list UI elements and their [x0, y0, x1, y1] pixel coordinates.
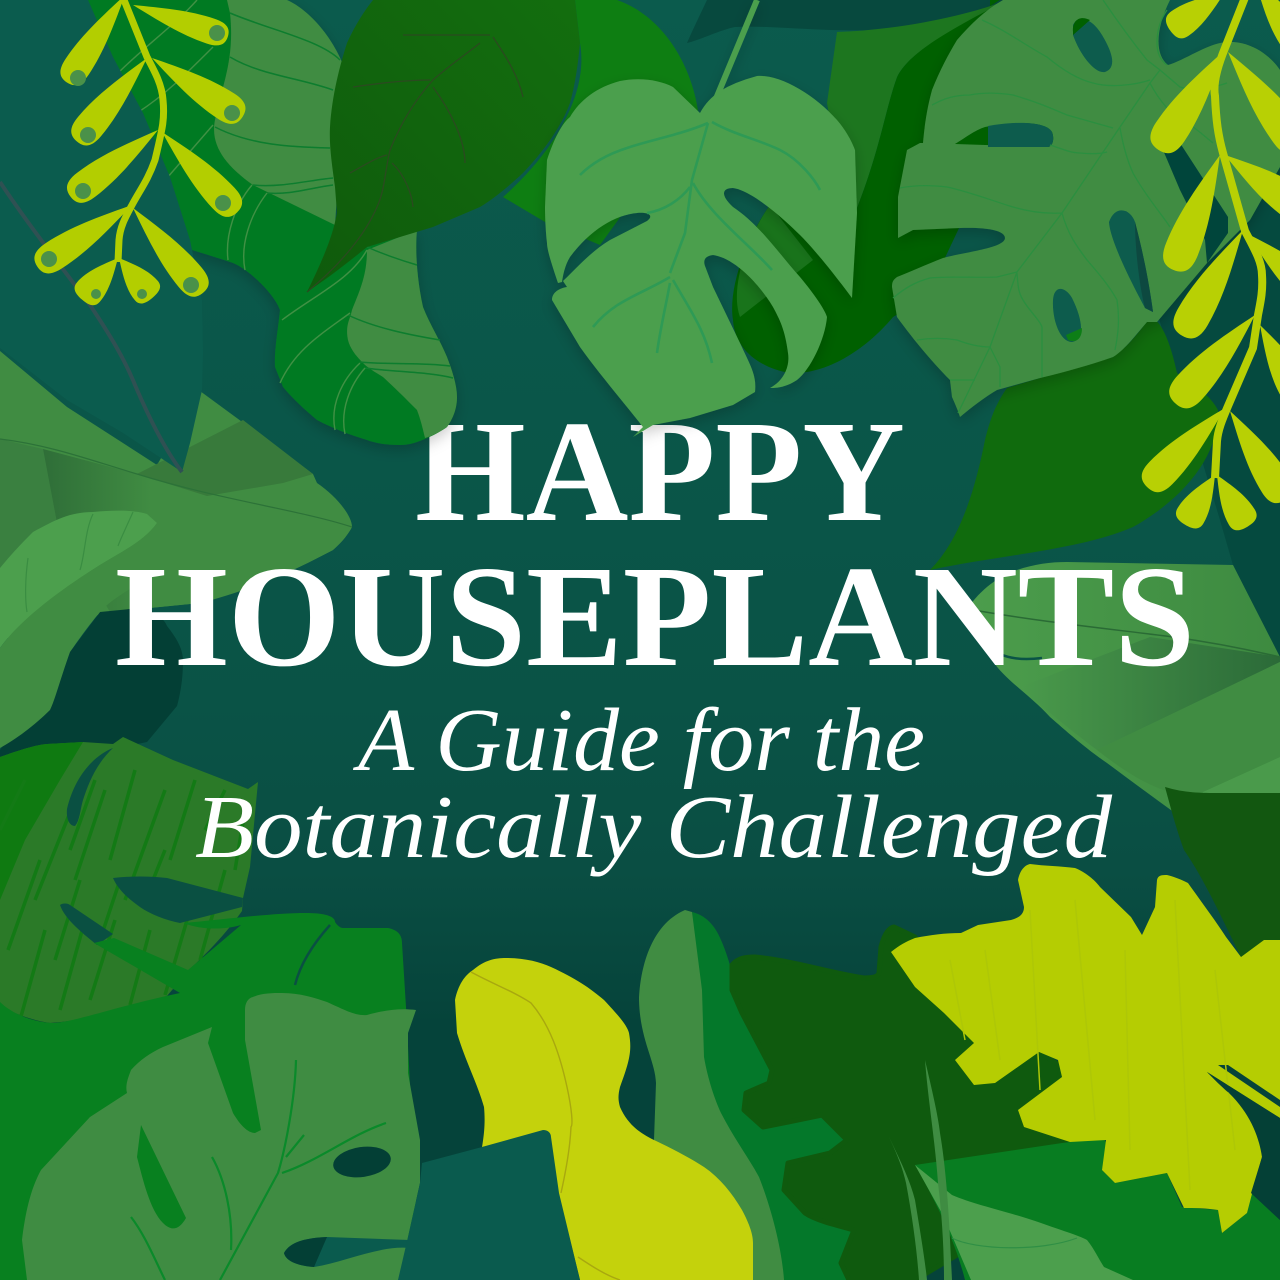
leaf: left large green	[0, 351, 352, 640]
leaf: top-left striped green	[88, 0, 457, 445]
vine: top right	[1136, 0, 1280, 534]
leaf: right dark lower	[1165, 787, 1280, 957]
subtitle: A Guide for the	[353, 691, 925, 790]
leaf: bottom left green	[0, 913, 420, 1280]
teal notch behind right monstera	[943, 226, 1010, 262]
leaf: dark green behind right monstera	[732, 0, 1007, 373]
leaf: top dark teal strip	[687, 0, 1007, 43]
title	[115, 392, 1195, 697]
leaf: bottom centre yellow	[455, 958, 753, 1280]
subtitle: Botanically Challenged	[195, 778, 1113, 877]
leaf: right small dark green	[930, 318, 1218, 570]
title: HAPPY	[415, 392, 905, 552]
leaf: right monstera	[892, 0, 1280, 417]
far right dark band	[1157, 167, 1280, 660]
grass blades	[889, 1060, 952, 1280]
leaf: bottom right bright green	[915, 1138, 1280, 1280]
leaf: left bright green	[0, 511, 157, 648]
leaf: top centre bright green	[503, 0, 698, 245]
leaf: top left teal with dark midrib	[0, 0, 203, 472]
leaf: yellow-green lobed leaf	[891, 864, 1280, 1233]
leaf: bottom left monstera	[22, 993, 420, 1280]
title: HOUSEPLANTS	[115, 537, 1195, 697]
subtitle	[195, 691, 1113, 877]
leaf: lower left textured	[0, 737, 258, 1023]
leaf: centre monstera	[545, 0, 857, 437]
leaf: dark green top	[307, 0, 580, 292]
leaf: bottom centre green	[639, 910, 880, 1280]
leaf: bottom dark green	[732, 927, 1100, 1280]
leaf: left dark teal	[0, 608, 183, 760]
leaf: right lower triangular teal	[1207, 1072, 1280, 1220]
vine: top left with seed dots	[29, 0, 251, 309]
leaf: left green lower layer	[0, 523, 163, 748]
leaf: right middle green	[968, 562, 1280, 813]
leaf: bottom teal	[398, 1130, 580, 1280]
